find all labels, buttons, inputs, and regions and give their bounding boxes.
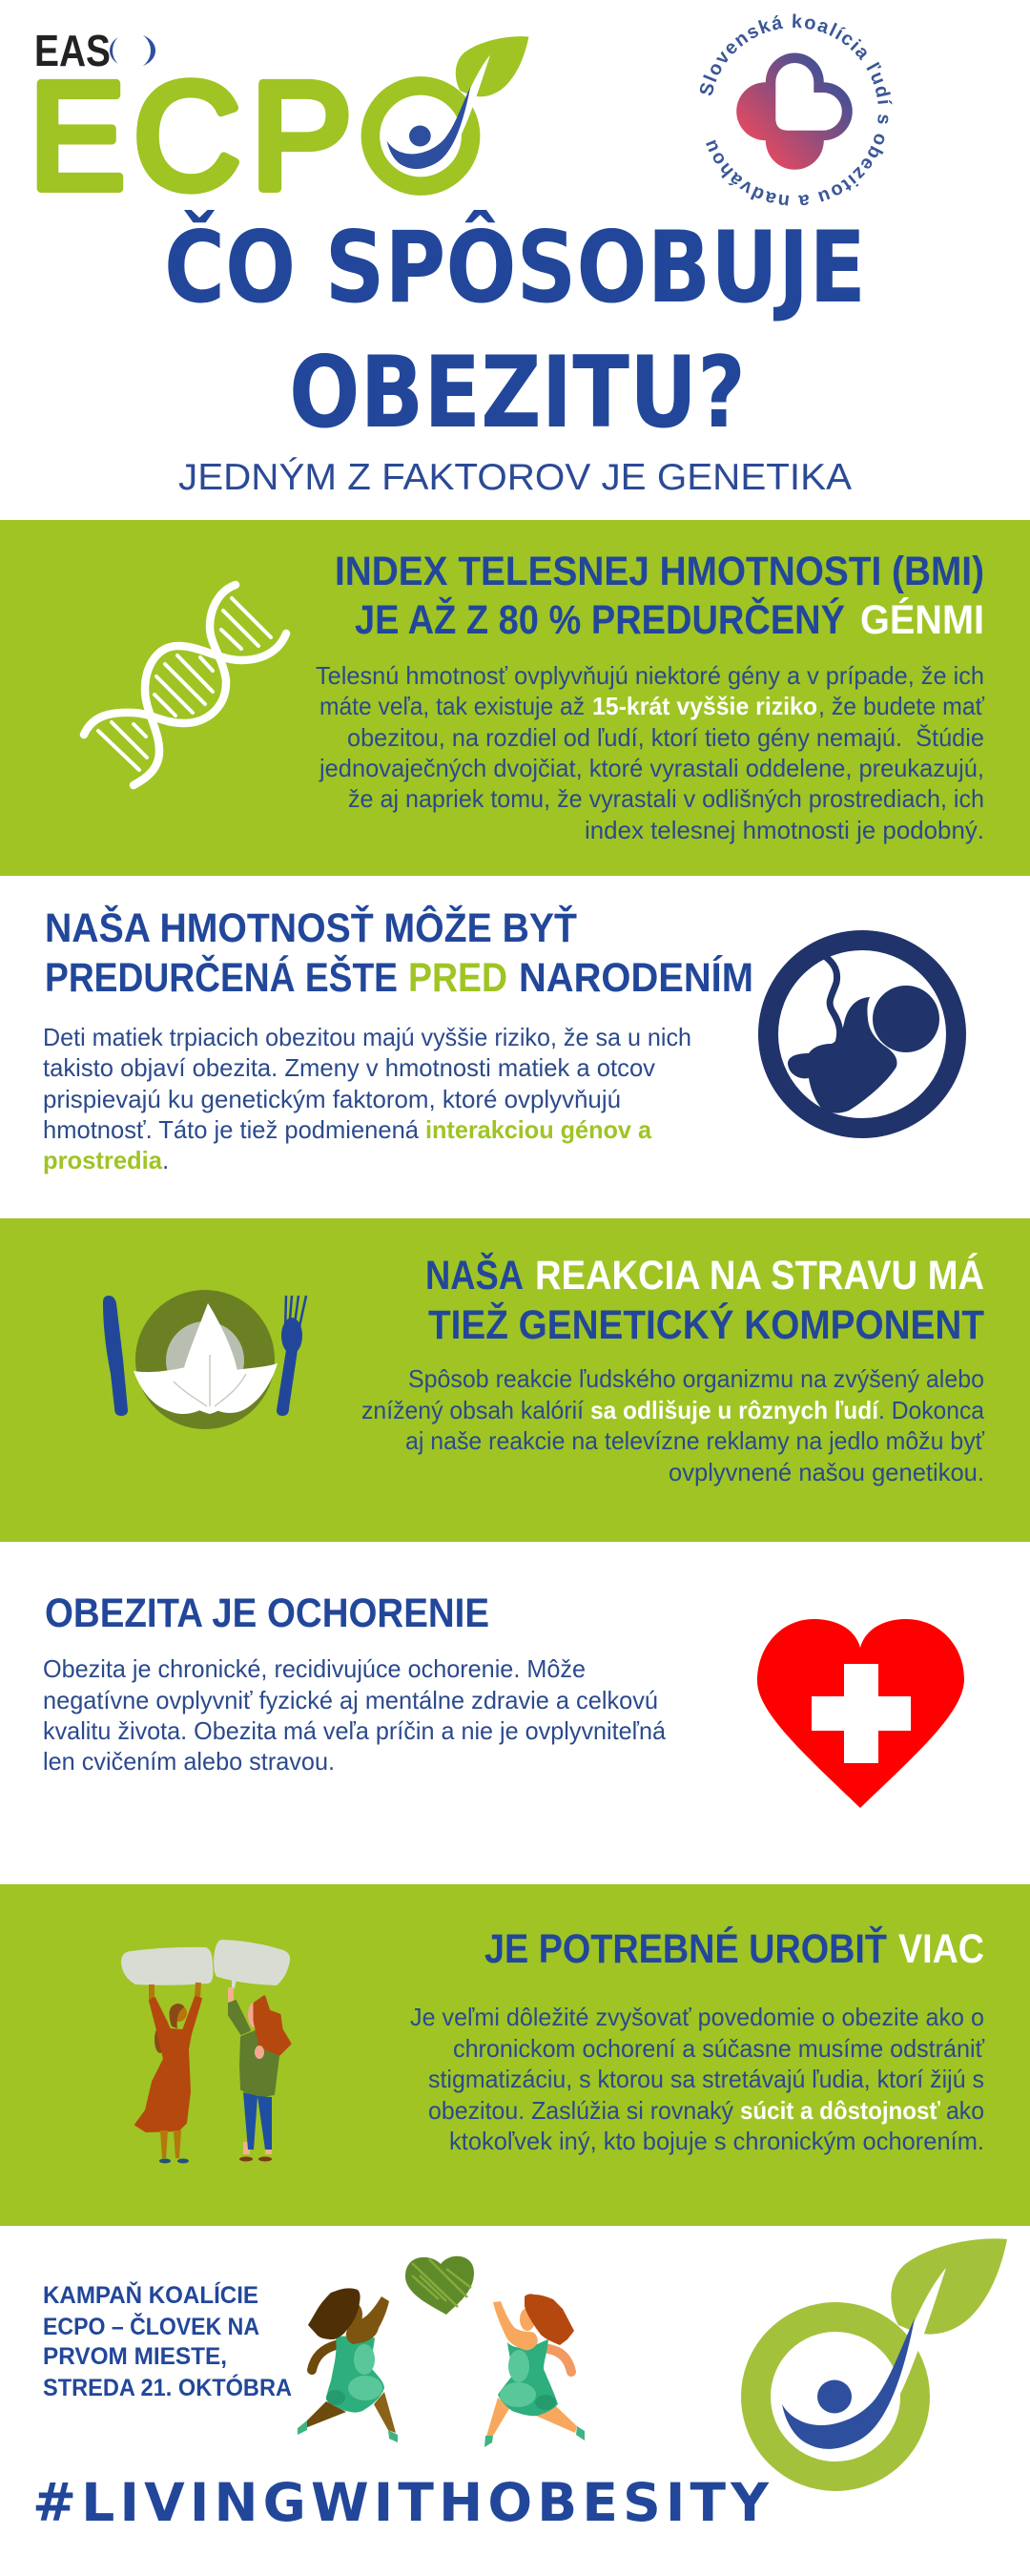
text block: disease (43, 1654, 667, 1776)
heading: before birth: PRED (408, 955, 507, 1001)
panel: BMI and genes (0, 520, 1030, 876)
campaign text: PRVOM MIESTE, (43, 2343, 227, 2370)
text block: disease: len cvičením alebo stravou. (43, 1747, 335, 1776)
panel: obesity is a disease (43, 1590, 964, 1808)
text block: disease: Obezita je chronické, recidivujúce ochorenie. Môže (43, 1654, 586, 1683)
text block: food: ovplyvnené našou genetikou. (669, 1458, 984, 1486)
text block: disease: negatívne ovplyvniť fyzické aj mentálne zdravie a celkovú (43, 1686, 658, 1714)
text block: food: . Dokonca (878, 1396, 984, 1424)
heading: before birth: PREDURČENÁ EŠTE (45, 954, 398, 1001)
text block: food: Spôsob reakcie ľudského organizmu na zvýšený alebo (408, 1364, 984, 1393)
title (164, 209, 866, 450)
heading: before birth (45, 904, 753, 1001)
logo: large ECPO mark (755, 2238, 1007, 2477)
text block: before birth: Deti matiek trpiacich obezitou majú vyššie riziko, že sa u nich (43, 1023, 691, 1051)
heading: more: JE POTREBNÉ UROBIŤ (484, 1925, 887, 1972)
campaign text: ECPO – ČLOVEK NA (43, 2312, 259, 2340)
text block: before birth: prispievajú ku genetickým faktorom, ktoré ovplyvňujú (43, 1085, 621, 1113)
icon: embryo in circle (769, 941, 956, 1128)
text block: before birth: takisto objaví obezita. Zmeny v hmotnosti matiek a otcov (43, 1053, 655, 1082)
text block: BMI: máte veľa, tak existuje až (319, 692, 585, 720)
icon: plate with leaves and cutlery (103, 1290, 306, 1429)
text block: BMI: obezitou, na rozdiel od ľudí, ktorí tieto gény nemajú. Štúdie (347, 723, 984, 752)
heading: disease: OBEZITA JE OCHORENIE (45, 1590, 489, 1636)
text block: BMI: že aj napriek tomu, že vyrastali v odlišných prostrediach, ich (348, 784, 984, 813)
heading: before birth: NARODENÍM (519, 955, 753, 1001)
text block: food: sa odlišuje u rôznych ľudí (590, 1396, 879, 1424)
logo: EASO: EAS (34, 26, 111, 75)
text block: more: obezitou. Zaslúžia si rovnaký (428, 2096, 733, 2125)
logo: ECPO: E (29, 50, 126, 221)
logo: ECPO: P (250, 50, 353, 221)
heading: food (425, 1252, 984, 1348)
panel: weight before birth (43, 904, 956, 1174)
logo: ECPO: C (134, 50, 241, 221)
heading: before birth: NAŠA HMOTNOSŤ MÔŽE BYŤ (45, 904, 577, 951)
logo: ECPO (29, 36, 528, 221)
hashtag: #LIVINGWITHOBESITY (32, 2472, 770, 2533)
campaign text (43, 2280, 292, 2401)
text block: BMI: 15-krát vyššie riziko (592, 692, 817, 720)
illustration: two women reaching for a heart (298, 2256, 585, 2447)
illustration: two women holding speech bubbles (121, 1940, 290, 2164)
text block: food (361, 1364, 984, 1486)
text block: before birth: . (162, 1146, 169, 1174)
title: ČO SPÔSOBUJE (164, 209, 866, 325)
text block: more: Je veľmi dôležité zvyšovať povedomie o obezite ako o (410, 2003, 984, 2031)
heading: BMI: GÉNMI (860, 597, 984, 643)
heading: food: TIEŽ GENETICKÝ KOMPONENT (428, 1301, 984, 1348)
heading: BMI (335, 549, 984, 643)
text block: BMI: jednovaječných dvojčiat, ktoré vyrastali oddelene, preukazujú, (319, 754, 984, 782)
text block: before birth (43, 1023, 691, 1174)
text block: more: stigmatizáciu, s ktorou sa stretávajú ľudia, ktorí žijú s (428, 2065, 984, 2093)
panel: reaction to food (0, 1218, 1030, 1542)
text block: disease: kvalitu života. Obezita má veľa príčin a nie je ovplyvniteľná (43, 1716, 667, 1745)
heading: food: NAŠA (425, 1252, 524, 1298)
text block: BMI: , že budete mať (818, 692, 984, 720)
text block: food: aj naše reakcie na televízne reklamy na jedlo môžu byť (405, 1426, 984, 1455)
text block: BMI: Telesnú hmotnosť ovplyvňujú niektoré gény a v prípade, že ich (316, 661, 984, 690)
icon: DNA helix (84, 585, 286, 785)
text block: more (410, 2003, 984, 2155)
text block: BMI: index telesnej hmotnosti je podobný. (585, 816, 984, 844)
text block: more: chronickom ochorení a súčasne musíme odstrániť (453, 2034, 984, 2063)
text block: before birth: interakciou génov a (425, 1115, 652, 1144)
subtitle: JEDNÝM Z FAKTOROV JE GENETIKA (178, 457, 852, 498)
logo: Slovak coalition badge: Slovenská koalícia ľudí s obezitou a nadváhou (700, 13, 893, 206)
icon: heart with cross (757, 1619, 964, 1808)
text block: food: znížený obsah kalórií (361, 1396, 585, 1424)
campaign text: STREDA 21. OKTÓBRA (43, 2373, 292, 2401)
heading: BMI: JE AŽ Z 80 % PREDURČENÝ (355, 596, 845, 643)
panel: need to do more (0, 1884, 1030, 2226)
text block: more: ktokoľvek iný, kto bojuje s chronickým ochorením. (449, 2127, 984, 2155)
text block: before birth: hmotnosť. Táto je tiež podmienená (43, 1115, 420, 1144)
text block: BMI (316, 661, 984, 844)
heading: food: REAKCIA NA STRAVU MÁ (535, 1253, 984, 1298)
campaign text: KAMPAŇ KOALÍCIE (43, 2280, 258, 2309)
title: OBEZITU? (289, 336, 746, 450)
text block: more: súcit a dôstojnosť (740, 2096, 940, 2125)
text block: before birth: prostredia (43, 1146, 163, 1174)
heading: more: VIAC (898, 1926, 984, 1972)
text block: more: ako (946, 2096, 984, 2125)
